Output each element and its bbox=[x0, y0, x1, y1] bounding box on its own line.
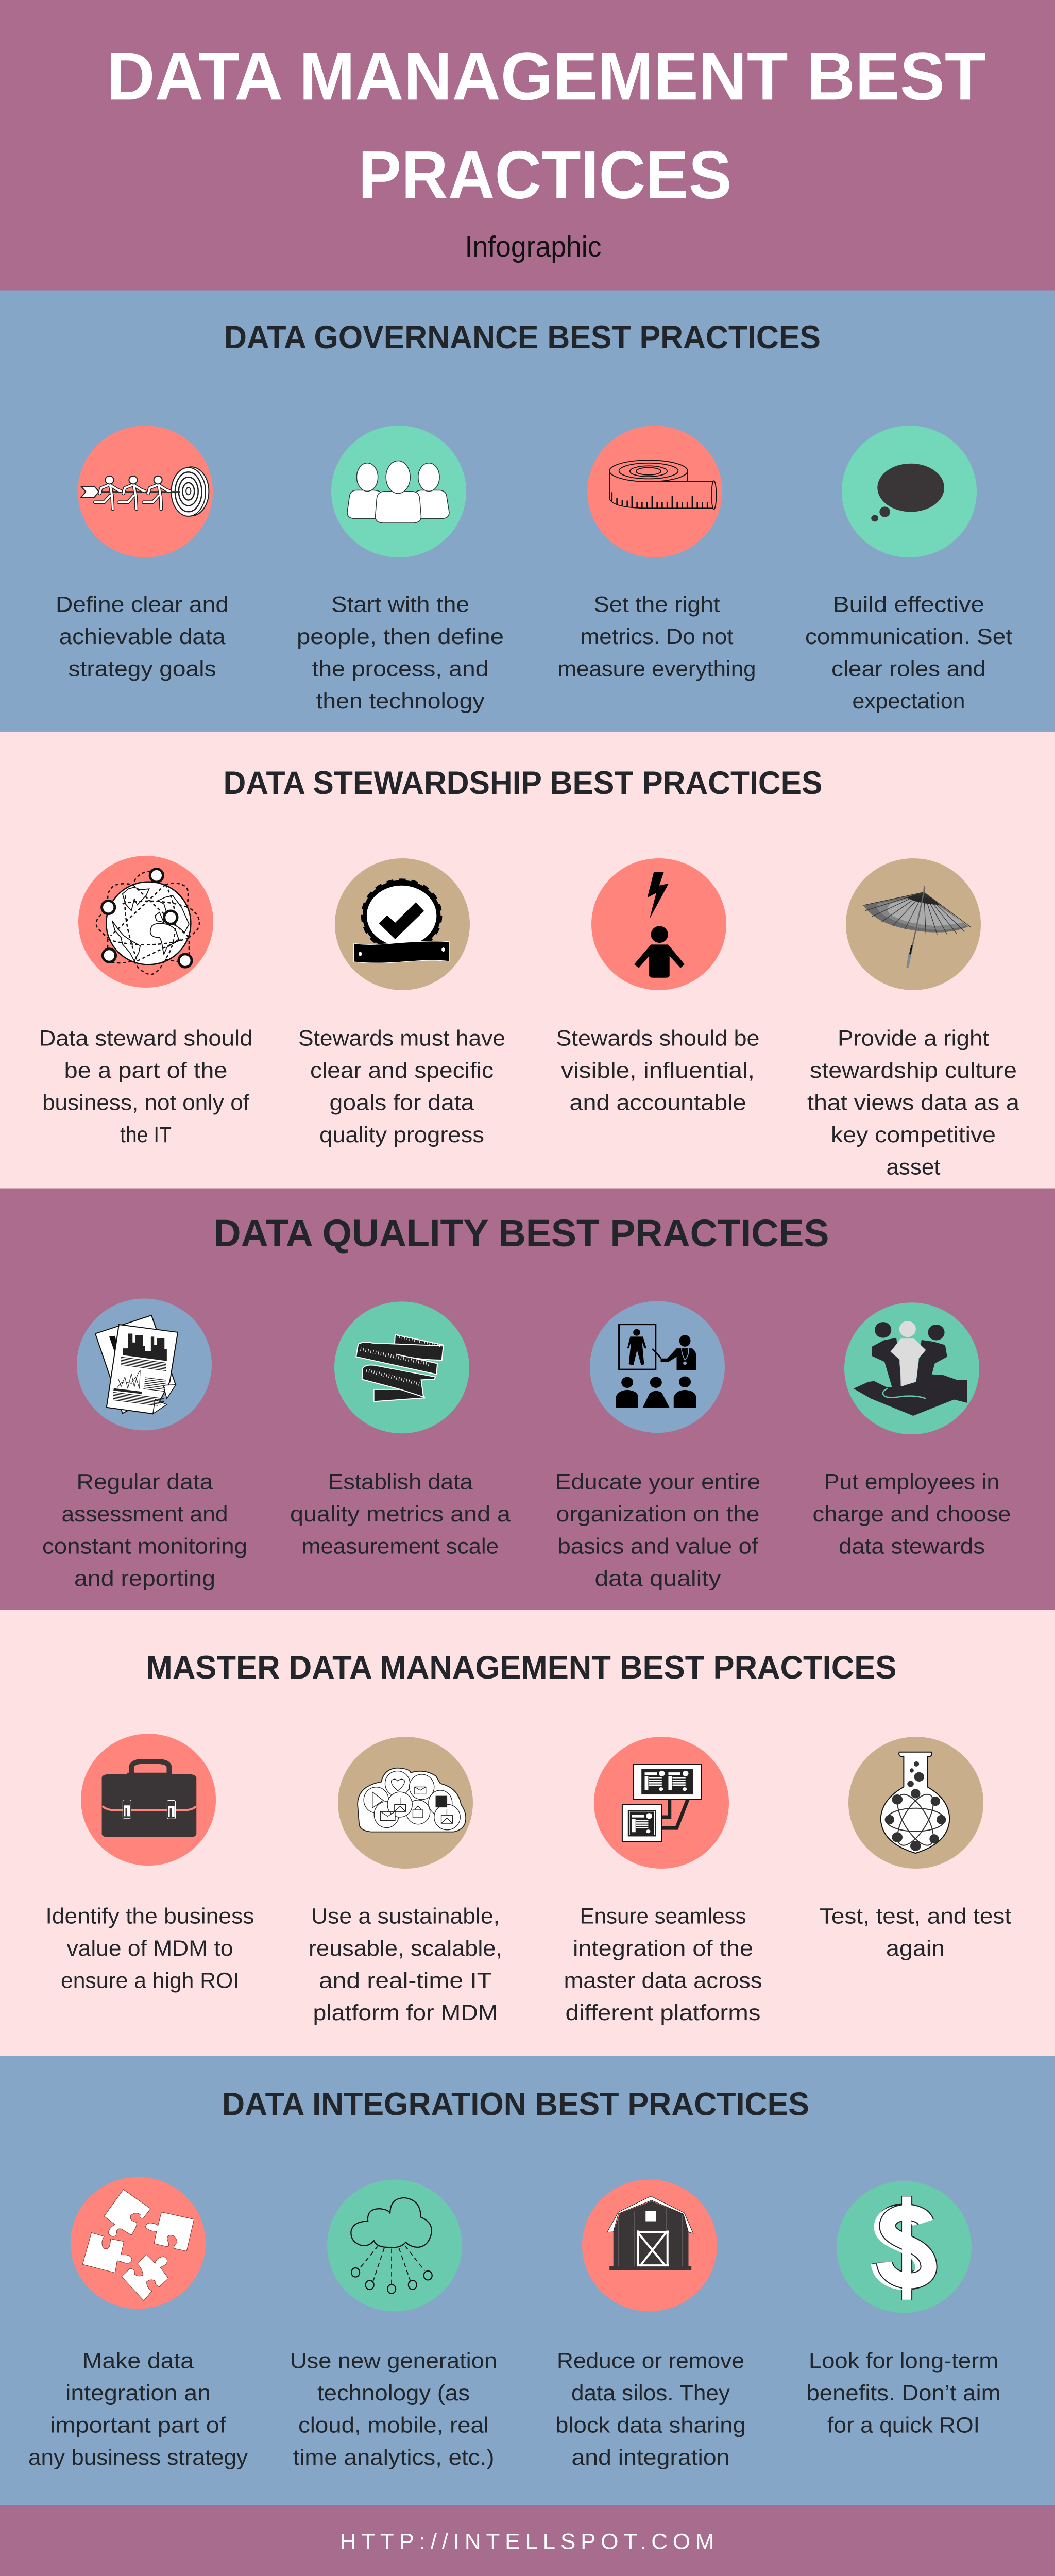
item: communication bbox=[805, 426, 1012, 714]
item: part of business bbox=[39, 856, 252, 1147]
text: visible stewards: and accountable bbox=[570, 1091, 746, 1115]
item: right metrics bbox=[557, 426, 756, 681]
item: employees in charge bbox=[813, 1302, 1011, 1559]
item: stewardship culture bbox=[807, 858, 1020, 1179]
text: quality metrics: measurement scale bbox=[302, 1534, 499, 1559]
text: clear goals: clear and specific bbox=[310, 1058, 494, 1083]
text: stewardship culture: stewardship culture bbox=[810, 1058, 1017, 1083]
text: visible stewards: Stewards should be bbox=[556, 1026, 760, 1050]
text: sustainable platform: and real-time IT bbox=[319, 1969, 492, 1993]
item: business value bbox=[46, 1734, 254, 1993]
text: integration strategy: any business strategy bbox=[28, 2446, 248, 2470]
title: DATA MANAGEMENT BEST bbox=[106, 39, 985, 114]
text: seamless integration bbox=[564, 1904, 762, 2025]
text: communication: expectation bbox=[852, 689, 965, 714]
text: remove silos: Reduce or remove bbox=[557, 2349, 744, 2374]
text: visible stewards bbox=[556, 1026, 759, 1115]
text: strategy goals: Define clear and bbox=[56, 592, 229, 617]
text: regular assessment: and reporting bbox=[74, 1567, 215, 1591]
item: educate organization bbox=[555, 1301, 760, 1591]
text: educate organization: organization on the bbox=[556, 1502, 760, 1527]
item: seamless integration bbox=[564, 1737, 762, 2025]
text: sustainable platform bbox=[309, 1904, 502, 2025]
item: regular assessment bbox=[42, 1299, 247, 1591]
item: integration strategy bbox=[28, 2177, 248, 2470]
text: people first: then technology bbox=[316, 689, 485, 714]
footer url: HTTP://INTELLSPOT.COM bbox=[340, 2530, 714, 2554]
title: PRACTICES bbox=[359, 137, 732, 213]
text: right metrics bbox=[557, 592, 756, 681]
text: communication: Build effective bbox=[833, 592, 984, 617]
icon: running team and target bbox=[78, 426, 213, 557]
text: part of business: business, not only of bbox=[42, 1091, 250, 1115]
panel: master data management bbox=[0, 1610, 1055, 2056]
icon: employees on a hand bbox=[844, 1302, 979, 1434]
text: stewardship culture: that views data as a bbox=[807, 1091, 1020, 1115]
text: educate organization: data quality bbox=[595, 1567, 721, 1591]
icon: twisted measuring tape bbox=[334, 1301, 469, 1433]
icon: connected screens bbox=[594, 1737, 729, 1869]
icon: thought bubble bbox=[842, 426, 977, 557]
item: test again bbox=[820, 1737, 1011, 1961]
text: employees in charge: charge and choose bbox=[813, 1502, 1011, 1527]
item: strategy goals bbox=[56, 426, 229, 681]
text: remove silos: block data sharing bbox=[555, 2413, 746, 2438]
text: regular assessment: Regular data bbox=[76, 1470, 213, 1495]
item: new technology bbox=[290, 2179, 497, 2470]
item: visible stewards bbox=[556, 858, 759, 1115]
text: long-term benefits: Look for long-term bbox=[809, 2349, 998, 2374]
text: seamless integration: master data across bbox=[564, 1969, 762, 1993]
text: clear goals bbox=[298, 1026, 505, 1147]
icon: tape measure roll bbox=[587, 426, 722, 557]
text: stewardship culture: Provide a right bbox=[838, 1026, 989, 1050]
text: business value: ensure a high ROI bbox=[61, 1969, 239, 1993]
text: strategy goals bbox=[56, 592, 229, 681]
icon: presenter and audience bbox=[590, 1301, 725, 1433]
text: new technology: technology (as bbox=[317, 2381, 470, 2405]
icon: cloud of speech bubbles bbox=[338, 1737, 473, 1869]
text: long-term benefits: for a quick ROI bbox=[827, 2413, 980, 2438]
text: sustainable platform: reusable, scalable, bbox=[309, 1936, 502, 1961]
text: clear goals: goals for data bbox=[330, 1091, 474, 1115]
heading: data stewardship: DATA STEWARDSHIP BEST PRACTICES bbox=[224, 765, 823, 801]
text: strategy goals: strategy goals bbox=[69, 657, 216, 681]
text: integration strategy: important part of bbox=[50, 2413, 227, 2438]
text: employees in charge: data stewards bbox=[839, 1534, 985, 1559]
text: test again: Test, test, and test bbox=[820, 1904, 1011, 1928]
text: visible stewards: visible, influential, bbox=[561, 1058, 755, 1083]
text: educate organization: basics and value of bbox=[557, 1534, 758, 1559]
item: sustainable platform bbox=[309, 1737, 502, 2025]
text: people first: people, then define bbox=[297, 624, 504, 649]
text: communication bbox=[805, 592, 1012, 714]
text: sustainable platform: platform for MDM bbox=[313, 2001, 498, 2025]
text: integration strategy bbox=[28, 2349, 248, 2470]
text: remove silos: data silos. They bbox=[571, 2381, 730, 2405]
text: integration strategy: Make data bbox=[82, 2349, 194, 2374]
text: new technology bbox=[290, 2349, 497, 2470]
text: test again bbox=[820, 1904, 1011, 1961]
panel: data stewardship bbox=[0, 732, 1055, 1189]
icon: globe with currency coins bbox=[78, 856, 213, 988]
text: right metrics: Set the right bbox=[593, 592, 720, 617]
text: quality metrics: quality metrics and a bbox=[290, 1502, 511, 1527]
text: new technology: Use new generation bbox=[290, 2349, 497, 2374]
text: educate organization: Educate your entire bbox=[555, 1470, 760, 1495]
text: seamless integration: integration of the bbox=[573, 1936, 753, 1961]
text: new technology: time analytics, etc.) bbox=[293, 2446, 495, 2470]
item: people first bbox=[297, 426, 504, 714]
text: clear goals: Stewards must have bbox=[298, 1026, 505, 1050]
icon: cloud network bbox=[327, 2179, 462, 2311]
text: part of business: be a part of the bbox=[64, 1058, 227, 1083]
text: business value: Identify the business bbox=[46, 1904, 254, 1928]
heading: data integration: DATA INTEGRATION BEST PRACTICES bbox=[222, 2086, 809, 2122]
text: seamless integration: Ensure seamless bbox=[580, 1904, 746, 1928]
panel: header bbox=[0, 0, 1055, 290]
text: part of business bbox=[39, 1026, 252, 1147]
panel: data quality bbox=[0, 1189, 1055, 1610]
text: stewardship culture: asset bbox=[886, 1155, 941, 1179]
panel: data integration bbox=[0, 2056, 1055, 2505]
text: long-term benefits bbox=[807, 2349, 1000, 2438]
heading: data quality: DATA QUALITY BEST PRACTICES bbox=[213, 1212, 829, 1255]
text: integration strategy: integration an bbox=[65, 2381, 211, 2405]
text: educate organization bbox=[555, 1470, 760, 1591]
item: clear goals bbox=[298, 858, 505, 1147]
text: right metrics: metrics. Do not bbox=[581, 624, 734, 649]
heading: data governance: DATA GOVERNANCE BEST PRACTICES bbox=[224, 318, 821, 355]
icon: three people bbox=[331, 426, 466, 557]
icon: umbrella bbox=[846, 858, 981, 990]
text: part of business: Data steward should bbox=[39, 1026, 252, 1050]
text: sustainable platform: Use a sustainable, bbox=[311, 1904, 500, 1928]
text: business value: value of MDM to bbox=[66, 1936, 233, 1961]
icon: dollar sign bbox=[837, 2181, 972, 2313]
heading: master data management: MASTER DATA MANAGEMENT BEST PRACTICES bbox=[146, 1649, 897, 1686]
text: seamless integration: different platforms bbox=[566, 2001, 761, 2025]
text: regular assessment: assessment and bbox=[62, 1502, 228, 1527]
text: clear goals: quality progress bbox=[319, 1123, 484, 1147]
subtitle: Infographic bbox=[465, 231, 602, 263]
item: remove silos bbox=[555, 2179, 746, 2470]
text: part of business: the IT bbox=[120, 1123, 172, 1147]
text: remove silos bbox=[555, 2349, 746, 2470]
text: quality metrics: Establish data bbox=[328, 1470, 473, 1495]
text: right metrics: measure everything bbox=[557, 657, 756, 681]
text: business value bbox=[46, 1904, 254, 1993]
text: new technology: cloud, mobile, real bbox=[298, 2413, 489, 2438]
text: long-term benefits: benefits. Don’t aim bbox=[807, 2381, 1001, 2405]
item: quality metrics bbox=[290, 1301, 511, 1559]
panel: data governance bbox=[0, 290, 1055, 732]
text: communication: clear roles and bbox=[831, 657, 986, 681]
text: regular assessment bbox=[42, 1470, 247, 1591]
icon: barn bbox=[582, 2179, 717, 2311]
text: people first: the process, and bbox=[312, 657, 489, 681]
text: stewardship culture: key competitive bbox=[831, 1123, 996, 1147]
text: employees in charge: Put employees in bbox=[824, 1470, 999, 1495]
item: long-term benefits bbox=[807, 2181, 1000, 2438]
icon: report documents bbox=[77, 1299, 212, 1430]
icon: briefcase bbox=[81, 1734, 216, 1866]
text: quality metrics bbox=[290, 1470, 511, 1559]
icon: puzzle pieces bbox=[71, 2177, 206, 2309]
text: regular assessment: constant monitoring bbox=[42, 1534, 247, 1559]
text: people first: Start with the bbox=[331, 592, 469, 617]
icon: check badge with ribbon bbox=[335, 858, 470, 990]
text: test again: again bbox=[886, 1936, 945, 1961]
text: remove silos: and integration bbox=[572, 2446, 730, 2470]
icon: flask with atom bbox=[848, 1737, 983, 1869]
icon: lightning and person bbox=[591, 858, 726, 990]
text: employees in charge bbox=[813, 1470, 1011, 1559]
panel: footer bbox=[0, 2505, 1055, 2576]
text: communication: communication. Set bbox=[805, 624, 1012, 649]
text: stewardship culture bbox=[807, 1026, 1020, 1179]
text: people first bbox=[297, 592, 504, 714]
text: strategy goals: achievable data bbox=[59, 624, 226, 649]
title bbox=[106, 39, 985, 213]
